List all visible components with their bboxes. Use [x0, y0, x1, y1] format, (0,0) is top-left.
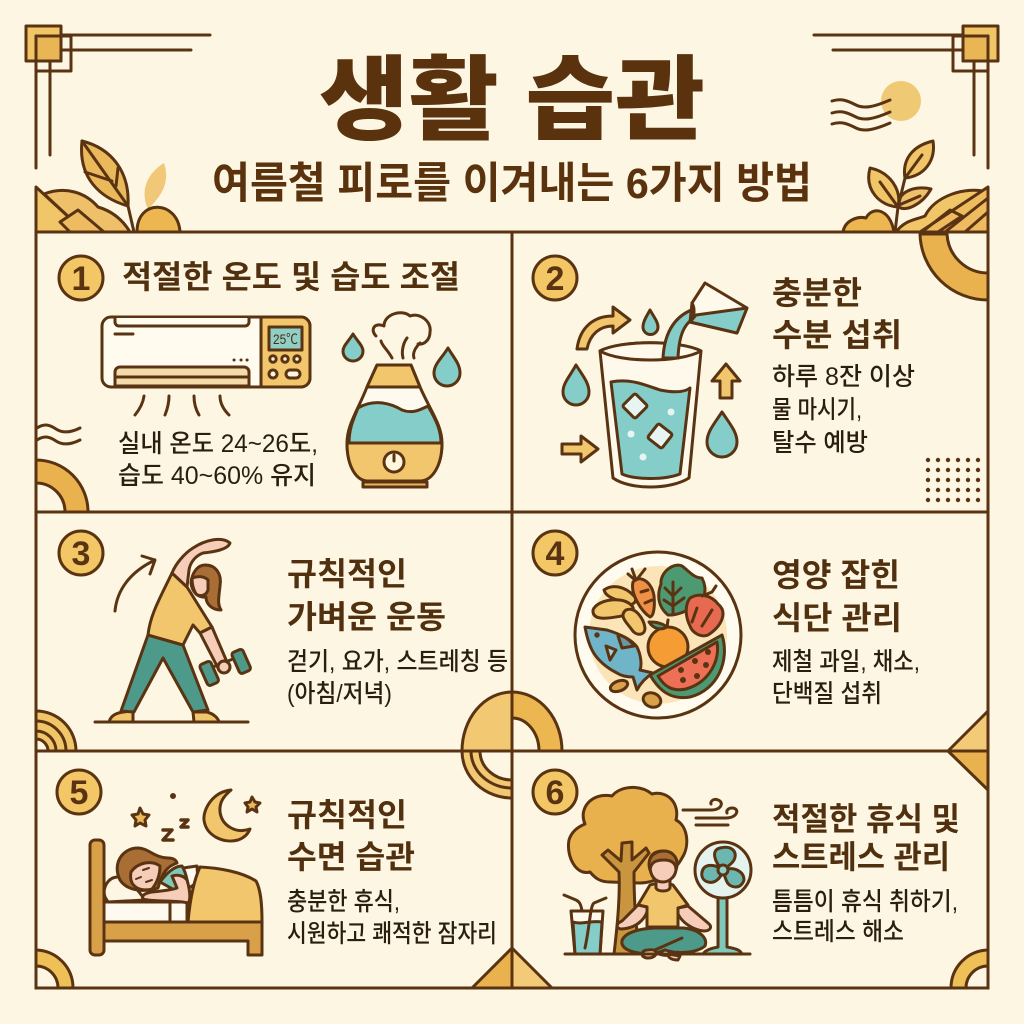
number badge 4: [533, 531, 577, 575]
body text 4: [772, 648, 920, 708]
heading 5: 규칙적인: [287, 797, 407, 833]
heading 3: 규칙적인: [287, 556, 407, 592]
heading 2: 수분 섭취: [772, 317, 902, 353]
heading 4: 식단 관리: [772, 600, 902, 636]
title: 생활 습관: [319, 50, 705, 152]
panel 2: water intake: [533, 256, 915, 487]
icon: stretching woman: [95, 539, 251, 722]
heading 4: 영양 잡힌: [772, 557, 900, 593]
number badge 1: [59, 256, 103, 300]
icon: glass of water: [600, 283, 747, 487]
body text 1: 실내 온도 24~26도,: [118, 430, 318, 458]
number badge 4: 4: [546, 535, 565, 573]
icon: moon and stars: [132, 790, 260, 841]
body text 1: [118, 430, 318, 490]
body text 4: 제철 과일, 채소,: [772, 648, 920, 676]
number badge 5: [57, 770, 101, 814]
corner ornament: top left: [26, 26, 210, 168]
decoration: dot grid: [926, 458, 980, 502]
number badge 5: 5: [70, 774, 88, 812]
body text 2: 물 마시기,: [772, 396, 862, 424]
body text 5: 시원하고 쾌적한 잠자리: [287, 920, 497, 948]
heading 5: [287, 797, 415, 875]
number badge 3: [59, 531, 103, 575]
panel 4: balanced diet: [533, 531, 920, 718]
heading 6: 적절한 휴식 및: [772, 801, 960, 837]
ground line: [565, 952, 750, 956]
subtitle: 여름철 피로를 이겨내는 6가지 방법: [212, 160, 812, 208]
heading 2: [772, 275, 902, 353]
body text 6: 틈틈이 휴식 취하기,: [772, 888, 958, 916]
icon: arrows: [562, 307, 740, 462]
decoration: sun and waves: [832, 81, 921, 130]
decoration: leaves and hills left: [36, 141, 180, 232]
heading 1: 적절한 온도 및 습도 조절: [122, 259, 460, 295]
number badge 6: 6: [546, 774, 564, 812]
number badge 2: [533, 256, 577, 300]
icon: humidifier: [343, 313, 460, 487]
body text 6: 스트레스 해소: [772, 918, 904, 946]
body text 2: 하루 8잔 이상: [772, 363, 915, 391]
corner ornament: top right: [814, 26, 998, 168]
decoration: leaves and hills right: [843, 141, 988, 232]
body text 5: 충분한 휴식,: [287, 888, 400, 916]
icon: meditating person: [617, 851, 711, 960]
heading 6: 스트레스 관리: [772, 839, 950, 875]
heading 5: 수면 습관: [287, 839, 415, 875]
body text 2: 탈수 예방: [772, 429, 868, 457]
icon: iced drink: [564, 895, 606, 954]
panel 1: temperature and humidity: [59, 256, 460, 490]
grid frame: [36, 232, 988, 988]
panel decorations: [36, 234, 988, 988]
icon: electric fan: [695, 842, 751, 954]
body text 4: 단백질 섭취: [772, 680, 882, 708]
body text 2: [772, 363, 915, 457]
number badge 2: 2: [546, 260, 564, 298]
icon: air conditioner: [102, 317, 310, 415]
icon: wind: [683, 799, 737, 825]
heading 3: [287, 556, 446, 635]
heading 6: [772, 801, 960, 875]
body text 3: 걷기, 요가, 스트레칭 등: [287, 648, 508, 676]
icon: air conditioner: 25℃: [273, 331, 298, 347]
heading 2: 충분한: [772, 275, 862, 311]
icon: bed and sleeping person: [90, 840, 262, 955]
body text 6: [772, 888, 958, 946]
body text 3: (아침/저녁): [287, 680, 392, 708]
heading 4: [772, 557, 902, 636]
icon: food plate: [575, 552, 741, 718]
number badge 3: 3: [72, 535, 90, 573]
body text 1: 습도 40~60% 유지: [118, 462, 316, 490]
body text 3: [287, 648, 508, 708]
body text 5: [287, 888, 497, 948]
number badge 6: [533, 770, 577, 814]
panel 3: light exercise: [59, 531, 508, 722]
icon: tree: [568, 787, 687, 954]
heading 3: 가벼운 운동: [287, 599, 446, 635]
panel 6: rest and stress: [533, 770, 960, 960]
panel 5: sleep: [57, 770, 497, 955]
number badge 1: 1: [72, 260, 90, 298]
icon: water drops: [563, 310, 737, 457]
